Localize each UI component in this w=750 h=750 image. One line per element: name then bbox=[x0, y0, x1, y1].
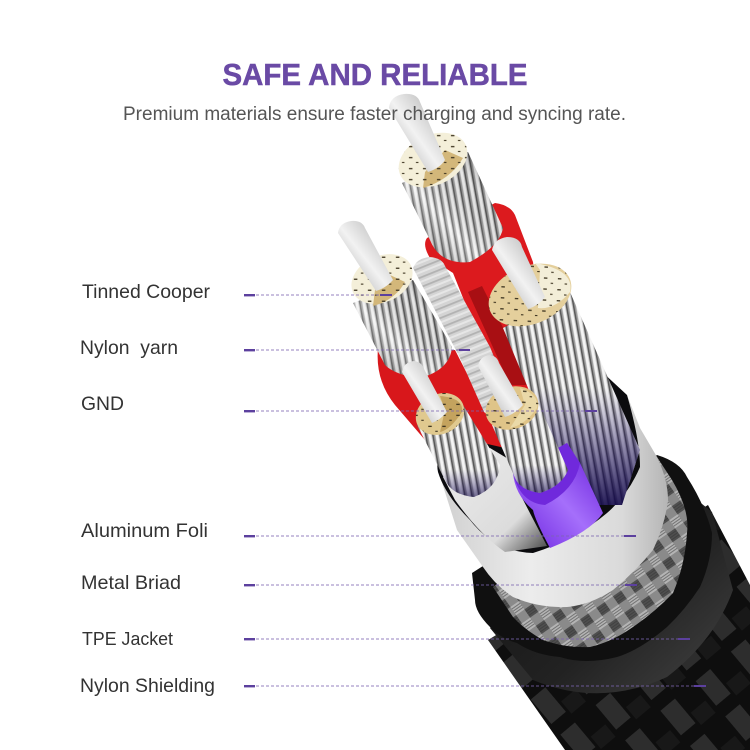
tinned copper: right bbox=[479, 252, 581, 338]
red insulation: left conductor bbox=[378, 348, 505, 448]
nylon yarn: center gray core bbox=[413, 257, 512, 425]
core: top tip bbox=[389, 94, 445, 172]
TPE jacket body bbox=[490, 470, 733, 693]
label: Nylon Shielding: Nylon Shielding bbox=[80, 675, 215, 697]
TPE jacket face bbox=[472, 455, 712, 661]
label: Tinned Cooper: Tinned Cooper bbox=[82, 281, 210, 303]
title: SAFE AND RELIABLE bbox=[222, 57, 528, 92]
aluminum foil bbox=[438, 395, 668, 607]
conductor: top strands bbox=[402, 152, 503, 262]
conductor: front center strands bbox=[492, 400, 568, 493]
metal braid bbox=[493, 457, 687, 647]
cable illustration bbox=[338, 94, 750, 750]
red insulation: top conductor bbox=[425, 203, 540, 395]
tinned copper: top bbox=[390, 122, 476, 198]
purple sleeve rim bbox=[513, 443, 580, 505]
core: front left tip bbox=[402, 361, 447, 423]
red highlight strip bbox=[468, 286, 532, 385]
conductor: right strands bbox=[503, 292, 640, 505]
conductor: left strands bbox=[353, 280, 452, 378]
label: Nylon yarn: Nylon yarn bbox=[80, 337, 178, 359]
tinned copper: front center bbox=[479, 379, 545, 437]
tinned copper: front left bbox=[409, 385, 471, 443]
core: front center tip bbox=[478, 355, 523, 417]
tinned copper: left bbox=[343, 245, 421, 313]
core: left tip bbox=[338, 221, 393, 291]
label: Aluminum Foli: Aluminum Foli bbox=[81, 520, 208, 542]
conductor: front left strands bbox=[417, 405, 500, 497]
label: Metal Briad: Metal Briad bbox=[81, 572, 181, 594]
outer nylon braid bbox=[488, 505, 750, 750]
purple insulation bbox=[513, 443, 603, 548]
foil opening bbox=[437, 370, 640, 553]
label: TPE Jacket: TPE Jacket bbox=[82, 628, 173, 649]
subtitle: Premium materials ensure faster charging and syncing rate. bbox=[123, 104, 626, 125]
label: GND: GND bbox=[81, 393, 124, 415]
white insulation bbox=[443, 448, 547, 552]
core: right tip bbox=[492, 237, 545, 309]
